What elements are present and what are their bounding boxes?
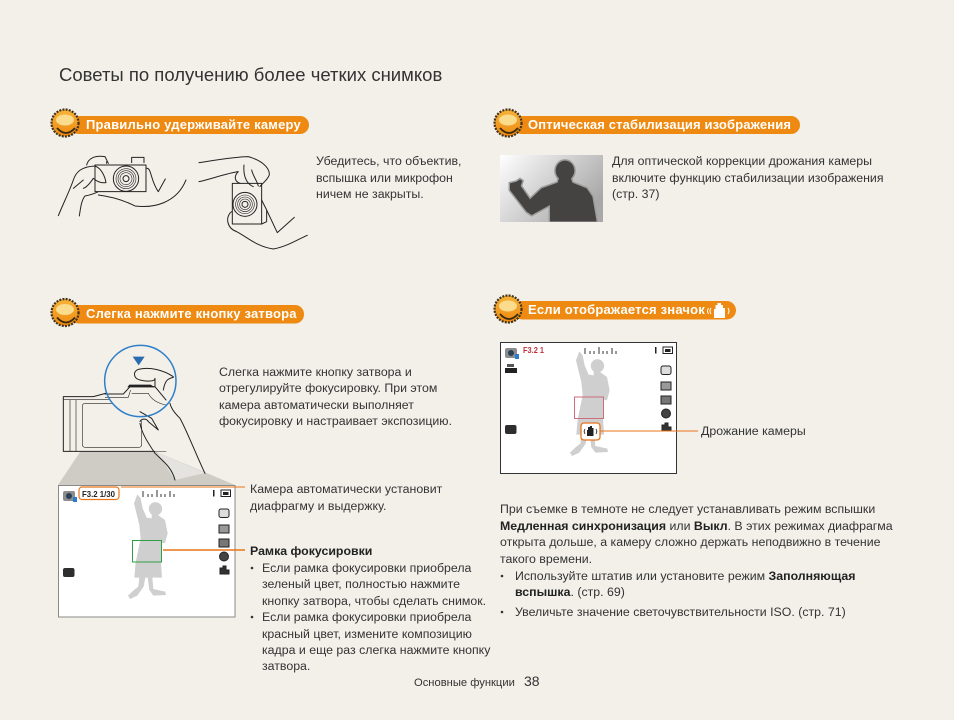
left side icon <box>505 425 516 434</box>
text: low light advice: открыта дольше, а камеру сложно держать неподвижно в течение <box>500 535 881 549</box>
heading: shake icon shown <box>494 296 736 322</box>
text: hold the camera: ничем не закрыты. <box>316 187 424 201</box>
exposure scale <box>585 347 616 354</box>
text: focus frame notes: красный цвет, измените композицию <box>262 627 472 641</box>
callout lines: screen <box>121 487 245 550</box>
text: focus frame notes: зеленый цвет, полностью нажмите <box>262 577 460 591</box>
ISO icon <box>505 364 517 373</box>
camera screen display with shake warning <box>500 342 676 474</box>
photo: blurred silhouette <box>500 155 603 222</box>
right side icons <box>219 509 229 574</box>
text: half press shutter: фокусировку и настраивает экспозицию. <box>219 414 452 428</box>
heading: half press shutter <box>52 299 304 326</box>
left side icon <box>63 568 74 577</box>
silhouette <box>570 351 610 456</box>
text: aperture note: Камера автоматически установит <box>250 482 443 496</box>
text: half press shutter <box>219 365 452 428</box>
text: half press shutter: Слегка нажмите кнопку затвора и <box>219 365 412 379</box>
title: Советы по получению более четких снимков <box>59 64 442 85</box>
text: focus frame notes <box>250 544 491 673</box>
text: low light advice: При съемке в темноте не следует устанавливать режим вспышки <box>500 502 875 516</box>
heading: optical stabilisation: Оптическая стабилизация изображения <box>528 117 791 132</box>
battery and counter <box>655 347 672 354</box>
heading: optical stabilisation <box>494 110 800 136</box>
focus frame <box>132 540 162 562</box>
text: low light advice: такого времени. <box>500 552 592 566</box>
camera mode icon <box>505 348 519 359</box>
text: hold the camera <box>316 154 461 201</box>
illustration: hands holding camera horizontally <box>58 156 186 216</box>
shake warning icon <box>581 423 600 440</box>
text: half press shutter: камера автоматически выполняет <box>219 398 414 412</box>
text: focus frame notes: Если рамка фокусировки приобрела <box>262 610 472 624</box>
silhouette <box>128 494 168 599</box>
text: aperture note <box>250 482 443 513</box>
text: optical stabilisation: (стр. 37) <box>612 187 660 201</box>
heading: hold the camera: Правильно удерживайте камеру <box>86 117 302 132</box>
text: focus frame notes: кнопку затвора, чтобы сделать снимок. <box>262 594 486 608</box>
heading: half press shutter: Слегка нажмите кнопку затвора <box>86 306 297 321</box>
illustration: finger pressing shutter <box>63 345 205 480</box>
callout line: shake <box>600 430 698 432</box>
text: optical stabilisation: включите функцию стабилизации изображения <box>612 171 884 185</box>
heading: hold the camera <box>52 110 309 136</box>
text: focus frame notes: кадра и еще раз слегка нажмите кнопку <box>262 643 491 657</box>
text: focus frame notes: Если рамка фокусировки приобрела <box>262 561 472 575</box>
right side icons <box>661 366 671 431</box>
label: shake: Дрожание камеры <box>701 424 806 438</box>
text: hold the camera: вспышка или микрофон <box>316 171 453 185</box>
viewing cone from camera to screen <box>58 452 235 485</box>
exposure scale <box>143 490 174 497</box>
camera mode icon <box>63 491 77 502</box>
text: hold the camera: Убедитесь, что объектив, <box>316 154 461 168</box>
text: half press shutter: отрегулируйте фокусировку. При этом <box>219 381 437 395</box>
text: low light advice: Увеличьте значение светочувствительности ISO. (стр. 71) <box>515 605 846 619</box>
aperture value: F3.2 1 <box>523 345 544 355</box>
footer: 38 <box>524 673 540 689</box>
text: low light advice: Медленная синхронизация или Выкл. В этих режимах диафрагма <box>500 519 893 533</box>
text: aperture note: диафрагму и выдержку. <box>250 499 386 513</box>
heading: shake icon shown: Если отображается значок <box>528 302 705 317</box>
aperture and shutter highlight: F3.2 1/30 <box>82 489 115 499</box>
illustration: hands holding camera vertically <box>199 157 307 249</box>
text: low light advice <box>500 502 893 619</box>
text: focus frame notes: Рамка фокусировки <box>250 544 372 558</box>
footer <box>414 673 540 689</box>
red focus frame <box>574 397 604 418</box>
text: low light advice: Используйте штатив или установите режим Заполняющая <box>515 569 855 583</box>
footer: Основные функции <box>414 677 515 689</box>
camera screen display <box>58 486 235 617</box>
battery and counter <box>213 490 230 496</box>
text: optical stabilisation <box>612 154 884 201</box>
text: optical stabilisation: Для оптической коррекции дрожания камеры <box>612 154 872 168</box>
page canvas <box>50 67 893 688</box>
text: focus frame notes: затвора. <box>262 659 310 673</box>
text: low light advice: вспышка. (стр. 69) <box>515 585 625 599</box>
